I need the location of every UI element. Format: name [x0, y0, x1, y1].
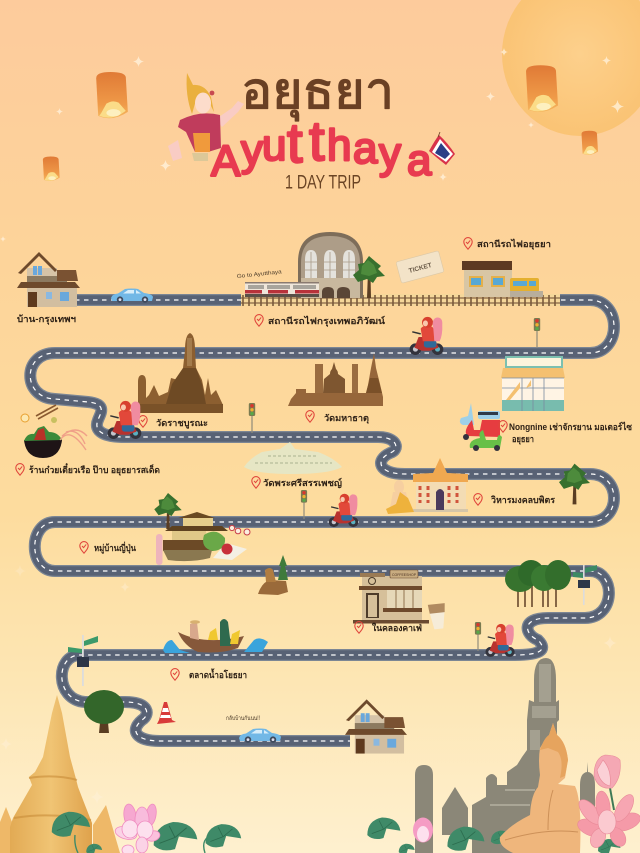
motorbike 2 — [108, 401, 141, 439]
title: Ayutthaya: y — [241, 126, 263, 175]
Japanese village — [154, 493, 250, 565]
lantern: moon large — [526, 65, 558, 112]
lotus leaves left — [52, 812, 241, 853]
title: Ayutthaya: a — [353, 124, 378, 173]
Wat Ratchaburana — [138, 333, 223, 413]
label: Japanese village — [80, 541, 137, 554]
road — [30, 300, 614, 741]
pink lotus right — [575, 755, 640, 850]
railway — [241, 294, 560, 306]
ticket: TICKET — [408, 262, 433, 275]
house: end — [345, 699, 407, 754]
title: Ayutthaya: a — [407, 136, 432, 185]
road sign: right — [573, 565, 597, 605]
label: Nongnine rental: อยุธยา — [512, 434, 534, 445]
road sign: left — [68, 635, 98, 686]
Viharn Mongkhon Bophit — [413, 458, 468, 512]
tree: right — [559, 464, 590, 504]
title: Ayutthaya: t — [287, 111, 303, 174]
title: Ayutthaya: u — [262, 121, 286, 170]
tree group — [505, 560, 571, 607]
motorbike 1 — [410, 317, 443, 355]
moon — [502, 0, 640, 136]
stump and pine — [258, 555, 288, 595]
label: Ayutthaya station — [464, 238, 551, 250]
lantern: left small — [43, 157, 60, 181]
label: Wat Ratchaburana: วัดราชบูรณะ — [156, 418, 208, 429]
title: Ayutthaya: A — [211, 137, 241, 186]
lantern: moon small — [582, 131, 598, 155]
golden chedi — [0, 695, 120, 853]
coffee shop: COFFEESHOP — [392, 573, 417, 577]
ticket — [396, 251, 444, 283]
traffic light 4 — [475, 622, 481, 651]
tree: station — [353, 256, 385, 298]
traffic light 3 — [301, 490, 307, 519]
label: Nongnine rental — [499, 421, 632, 445]
floating market boat — [163, 619, 268, 653]
rental shop — [501, 356, 565, 411]
title: Thai: อยุธยา — [241, 63, 394, 121]
Ayutthaya station — [462, 261, 543, 297]
label: Krung Thep Aphiwat station — [255, 315, 386, 327]
grey prang — [415, 658, 595, 853]
label: Ayutthaya station: สถานีรถไฟอยุธยา — [477, 238, 551, 250]
label: Nongnine rental: Nongnine เช่าจักรยาน มอเตอร์ไซ — [509, 421, 632, 432]
traffic cone — [157, 702, 176, 724]
label: noodle shop: ร้านก๋วยเตี๋ยวเรือ ป๊าบ อยุธยารสเด็ด — [29, 463, 160, 476]
motorbike 3 — [329, 494, 358, 527]
train — [245, 282, 319, 297]
tree: lower left — [84, 690, 124, 733]
train caption: Go to Ayutthaya — [237, 269, 283, 280]
house: start — [17, 252, 80, 307]
label: Viharn — [474, 494, 555, 505]
label: floating market: ตลาดน้ำอโยธยา — [189, 668, 247, 680]
Buddha statue — [500, 723, 580, 853]
caption: going home: กลับบ้านกันนน!! — [226, 715, 260, 722]
lotus leaves right — [367, 817, 620, 853]
coffee cup — [428, 603, 447, 630]
Wat Mahathat — [288, 353, 383, 406]
label: coffee — [355, 622, 422, 633]
label: Krung Thep Aphiwat station: สถานีรถไฟกรุงเทพอภิวัฒน์ — [268, 315, 386, 327]
Wat Phra Si Sanphet — [244, 442, 342, 474]
lantern: left large — [96, 72, 128, 118]
label: coffee: ในคลองคาเฟ่ — [372, 622, 422, 633]
Krung Thep Aphiwat station — [298, 232, 363, 298]
title: Ayutthaya: t — [309, 109, 325, 172]
motorbike 4 — [485, 624, 515, 657]
label: Wat Mahathat: วัดมหาธาตุ — [324, 413, 369, 424]
label: Viharn: วิหารมงคลบพิตร — [490, 495, 555, 505]
subtitle: 1 DAY TRIP — [285, 172, 361, 194]
icon: Thai flag — [429, 132, 455, 165]
label: Wat Phra Si Sanphet — [252, 477, 342, 489]
car: start — [111, 288, 153, 303]
label: Wat Phra Si Sanphet: วัดพระศรีสรรเพชญ์ — [263, 477, 342, 489]
dancer illustration — [168, 73, 244, 161]
noodle bowl — [21, 405, 87, 458]
car: end — [239, 728, 281, 743]
label: home Bangkok: บ้าน-กรุงเทพฯ — [17, 314, 76, 325]
traffic light 2 — [249, 403, 255, 433]
seated Buddha small — [386, 480, 414, 514]
small pink lotus — [413, 818, 433, 842]
coffee shop — [353, 570, 429, 624]
label: Japanese village: หมู่บ้านญี่ปุ่น — [94, 541, 137, 554]
scooters — [460, 403, 502, 451]
label: Wat Mahathat — [306, 411, 369, 424]
traffic light 1 — [534, 318, 540, 348]
title: Ayutthaya: h — [327, 121, 351, 170]
pink lotus left — [114, 803, 161, 853]
label: noodle shop — [16, 463, 160, 476]
label: floating market — [171, 668, 247, 680]
label: Wat Ratchaburana — [139, 416, 208, 429]
title: Ayutthaya: y — [379, 129, 401, 178]
